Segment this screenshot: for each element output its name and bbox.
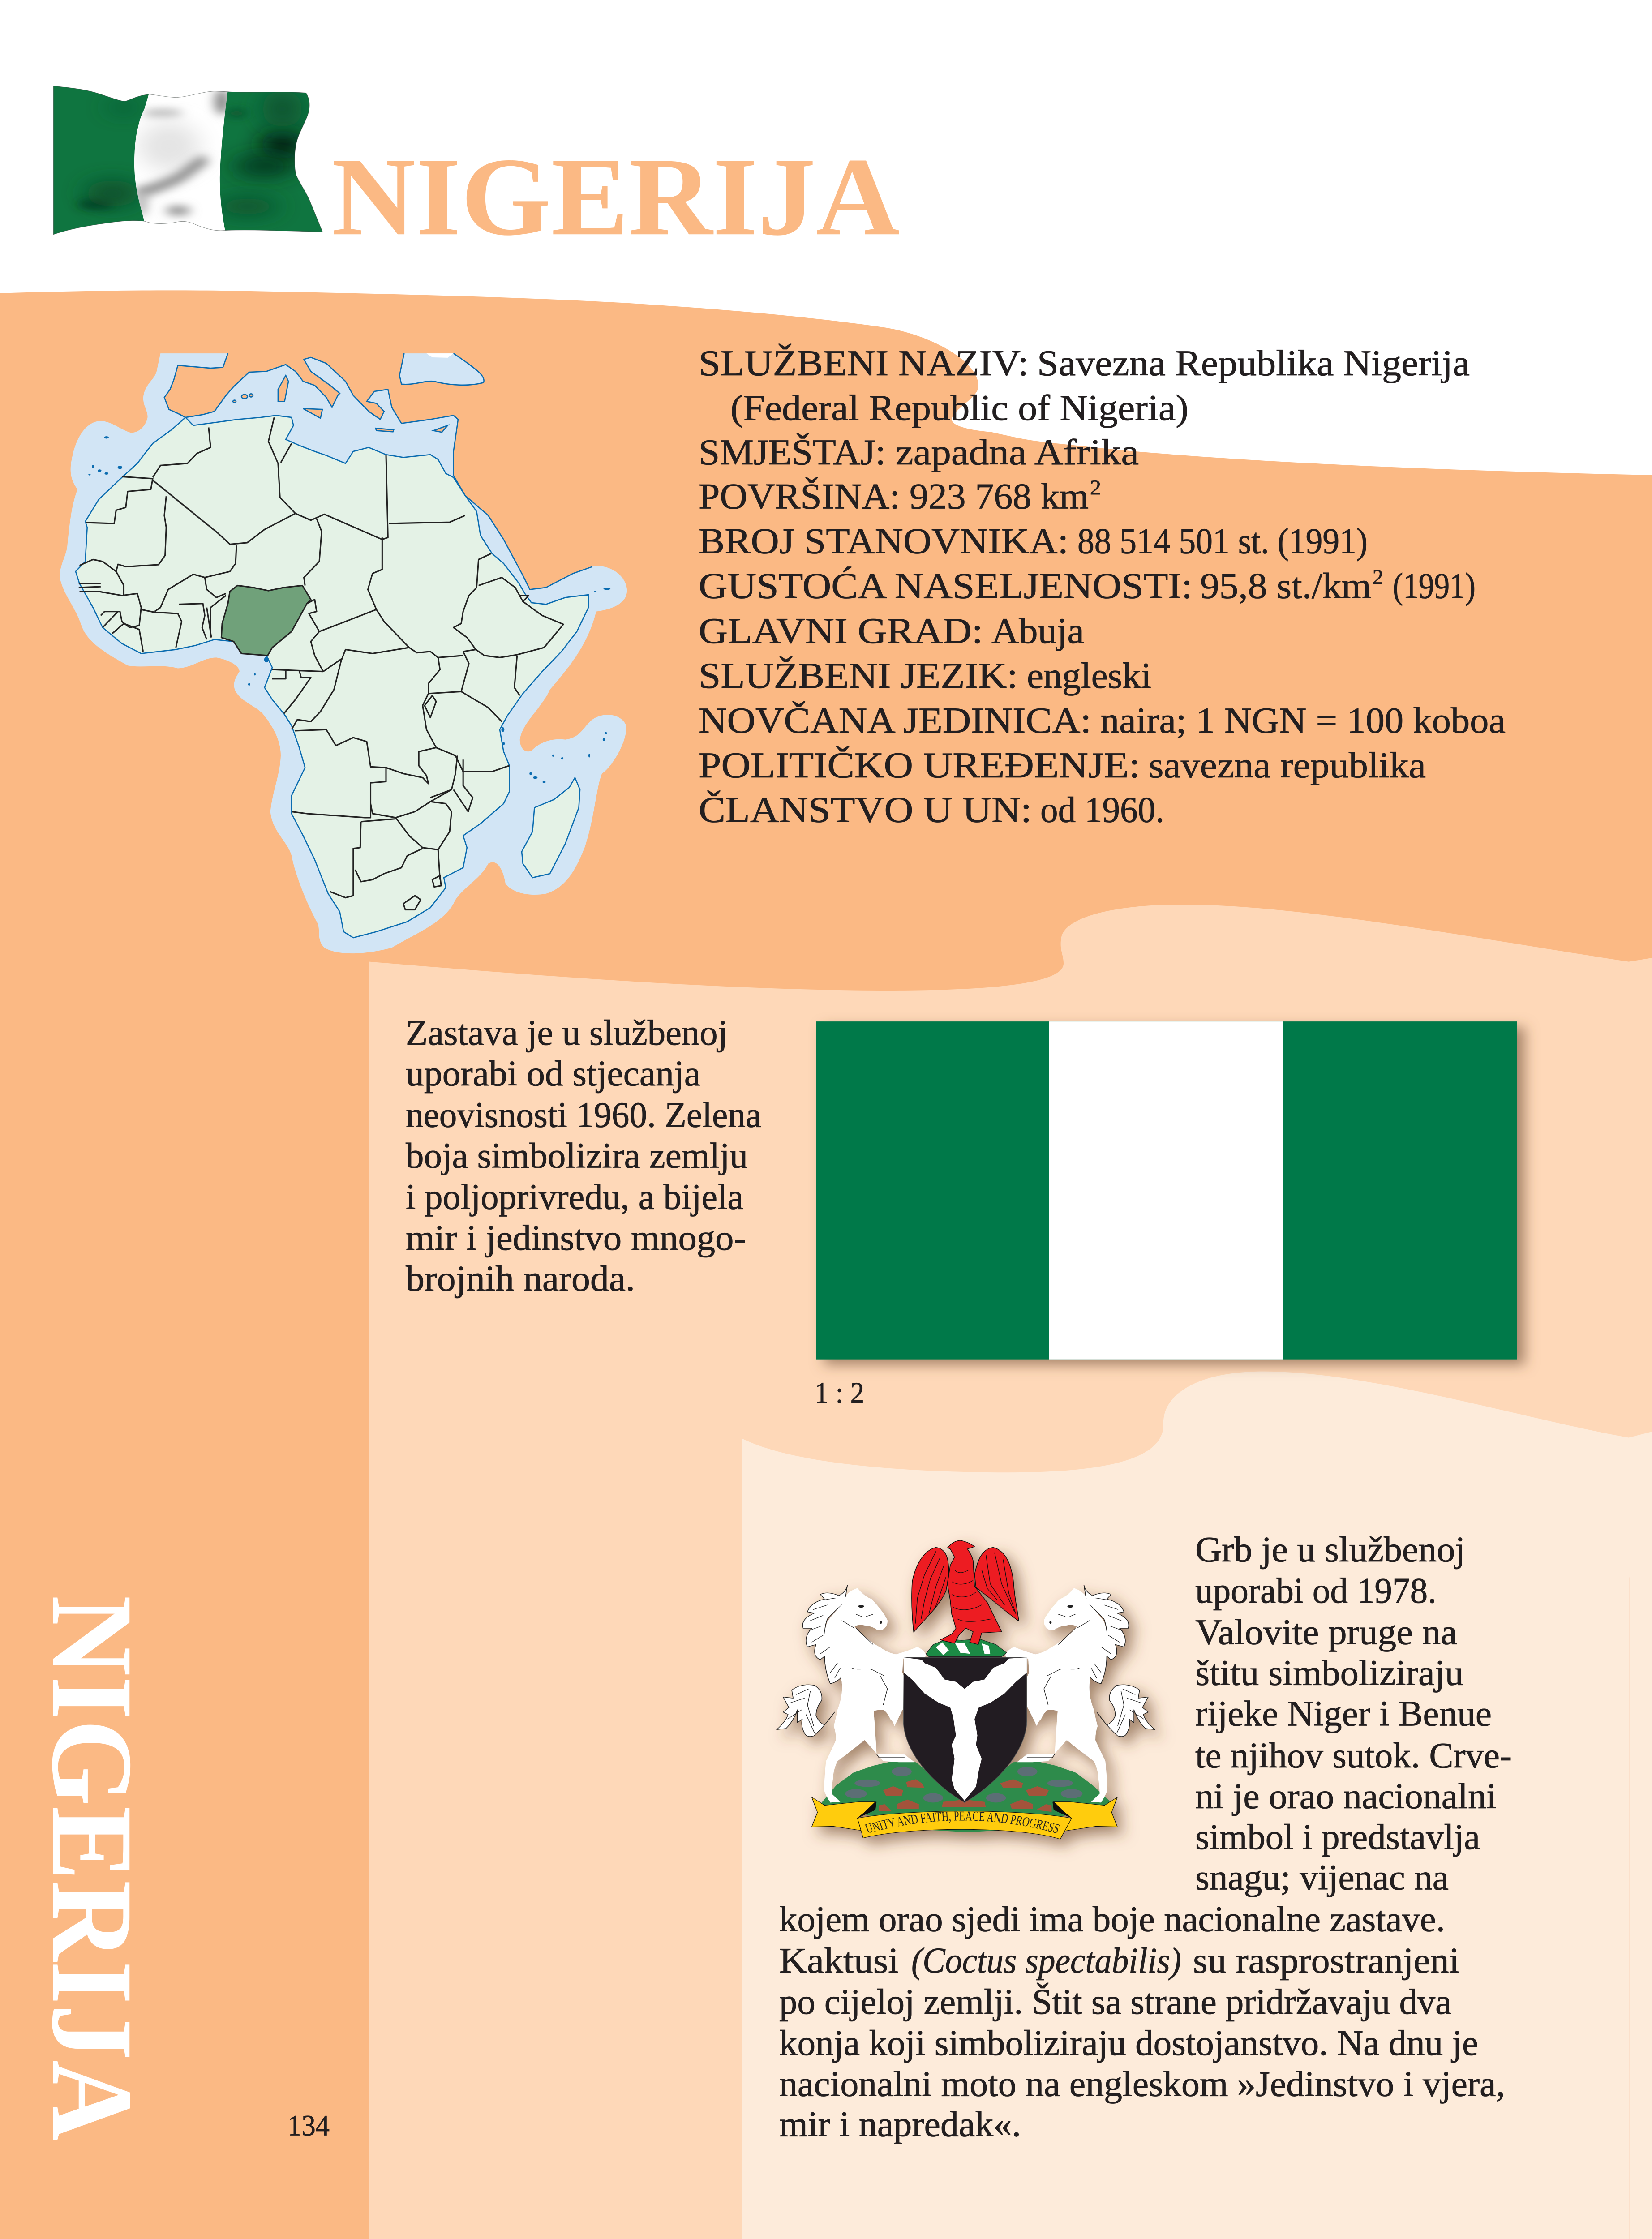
- flag text: brojnih naroda.: [406, 1259, 635, 1299]
- map: country borders: [79, 417, 563, 909]
- fact: political system: [699, 745, 1426, 785]
- coat of arms text: nacionalni moto na engleskom »Jedinstvo i vjera,: [779, 2064, 1505, 2104]
- coat of arms text: su rasprostranjeni: [1193, 1940, 1459, 1980]
- arms: motto ribbon: [812, 1797, 1117, 1839]
- fact: official name: [699, 343, 1470, 429]
- coat of arms text: simbol i predstavlja: [1195, 1817, 1480, 1857]
- fact: area: 2: [1090, 476, 1101, 499]
- fact: location: zapadna Afrika: [896, 432, 1139, 472]
- coat of arms text: štitu simboliziraju: [1195, 1653, 1463, 1693]
- fact: area: [699, 476, 1101, 517]
- coat of arms text: po cijeloj zemlji. Štit sa strane pridržavaju dva: [779, 1982, 1451, 2022]
- coat of arms text: rijeke Niger i Benue: [1195, 1694, 1492, 1733]
- background: peach wave: [369, 905, 1652, 2239]
- background: cream wave: [742, 1372, 1652, 2239]
- fact: political system: savezna republika: [1149, 745, 1426, 785]
- fact: currency: NOVČANA JEDINICA:: [699, 700, 1091, 741]
- arms: grass mound: [820, 1761, 1113, 1832]
- fact: density: [699, 566, 1476, 606]
- map: European and Asian coast: [164, 353, 592, 589]
- coat of arms text: snagu; vijenac na: [1195, 1857, 1449, 1897]
- map: small islands: [88, 436, 610, 783]
- fact: density: GUSTOĆA NASELJENOSTI:: [699, 566, 1193, 606]
- arms: wreath: [926, 1639, 1007, 1657]
- map: sea halo: [60, 353, 627, 953]
- vertical title: NIGERIJA: [28, 1596, 157, 2140]
- flag text: neovisnosti 1960. Zelena: [406, 1095, 761, 1135]
- country facts: [699, 343, 1506, 830]
- fact: area: POVRŠINA:: [699, 476, 900, 517]
- fact: language: engleski: [1027, 656, 1151, 696]
- fact: official name: (Federal Republic of Nigeria): [730, 388, 1189, 429]
- Nigerian flag: [816, 1021, 1517, 1360]
- flag text: i poljoprivredu, a bijela: [406, 1177, 743, 1217]
- fact: UN membership: od 1960.: [1040, 790, 1164, 830]
- map: Madagascar: [522, 778, 580, 878]
- map: Nigeria highlighted: [221, 585, 311, 656]
- coat of arms text: te njihov sutok. Crve-: [1195, 1735, 1512, 1775]
- coat of arms text: Valovite pruge na: [1195, 1612, 1457, 1652]
- fact: capital: GLAVNI GRAD:: [699, 611, 983, 652]
- flag text: [406, 1012, 761, 1299]
- title: NIGERIJA: [332, 135, 900, 259]
- fact: area: 923 768 km: [910, 476, 1089, 517]
- map: Mediterranean islands: [233, 375, 448, 432]
- fact: population: BROJ STANOVNIKA:: [699, 521, 1068, 562]
- page number: 134: [287, 2110, 330, 2142]
- fact: political system: POLITIČKO UREĐENJE:: [699, 745, 1140, 785]
- coat of arms text: kojem orao sjedi ima boje nacionalne zastave.: [779, 1899, 1445, 1939]
- map of Africa: [60, 353, 627, 953]
- fact: capital: Abuja: [991, 611, 1084, 652]
- fact: official name: Savezna Republika Nigerija: [1037, 343, 1470, 384]
- coat of arms text: Grb je u službenoj: [1195, 1529, 1465, 1570]
- fact: language: [699, 656, 1151, 696]
- map: Black Sea: [399, 353, 484, 385]
- coat of arms text: (Coctus spectabilis): [911, 1940, 1181, 1980]
- coat of arms text: mir i napredak«.: [779, 2104, 1021, 2144]
- arms: shield: [903, 1657, 1027, 1802]
- fact: population: [699, 521, 1368, 562]
- flag text: Zastava je u službenoj: [406, 1012, 728, 1053]
- arms: motto ribbon: UNITY AND FAITH, PEACE AND PROGRESS: [863, 1809, 1062, 1836]
- fact: UN membership: ČLANSTVO U UN:: [699, 790, 1032, 830]
- fact: official name: SLUŽBENI NAZIV:: [699, 343, 1029, 384]
- arms: eagle: [912, 1540, 1019, 1644]
- flag text: uporabi od stjecanja: [406, 1054, 700, 1094]
- coat of arms text: konja koji simboliziraju dostojanstvo. Na dnu je: [779, 2023, 1478, 2063]
- fact: density: 95,8 st./km: [1200, 566, 1371, 606]
- fact: capital: [699, 611, 1084, 652]
- fact: currency: naira; 1 NGN = 100 koboa: [1100, 700, 1506, 741]
- fact: population: 88 514 501 st. (1991): [1077, 521, 1368, 562]
- arms: right horse: [1005, 1585, 1155, 1802]
- map: African continent: [76, 416, 588, 938]
- fact: currency: [699, 700, 1506, 741]
- fact: language: SLUŽBENI JEZIK:: [699, 656, 1018, 696]
- coat of arms text: uporabi od 1978.: [1195, 1571, 1437, 1611]
- flag text: mir i jedinstvo mnogo-: [406, 1218, 746, 1258]
- flag text: boja simbolizira zemlju: [406, 1136, 748, 1175]
- coat of arms: [777, 1540, 1155, 1839]
- arms: left horse: [777, 1585, 926, 1802]
- fact: location: [699, 432, 1139, 472]
- coat of arms text: ni je orao nacionalni: [1195, 1776, 1497, 1816]
- fact: location: SMJEŠTAJ:: [699, 432, 886, 472]
- fact: UN membership: [699, 790, 1164, 830]
- icon: waving Nigerian flag: [45, 83, 330, 238]
- coat of arms text: [779, 1529, 1512, 2144]
- fact: density: 2: [1373, 566, 1383, 589]
- coat of arms text: Kaktusi: [779, 1940, 899, 1980]
- flag ratio: 1 : 2: [815, 1376, 864, 1409]
- fact: density: (1991): [1393, 566, 1476, 606]
